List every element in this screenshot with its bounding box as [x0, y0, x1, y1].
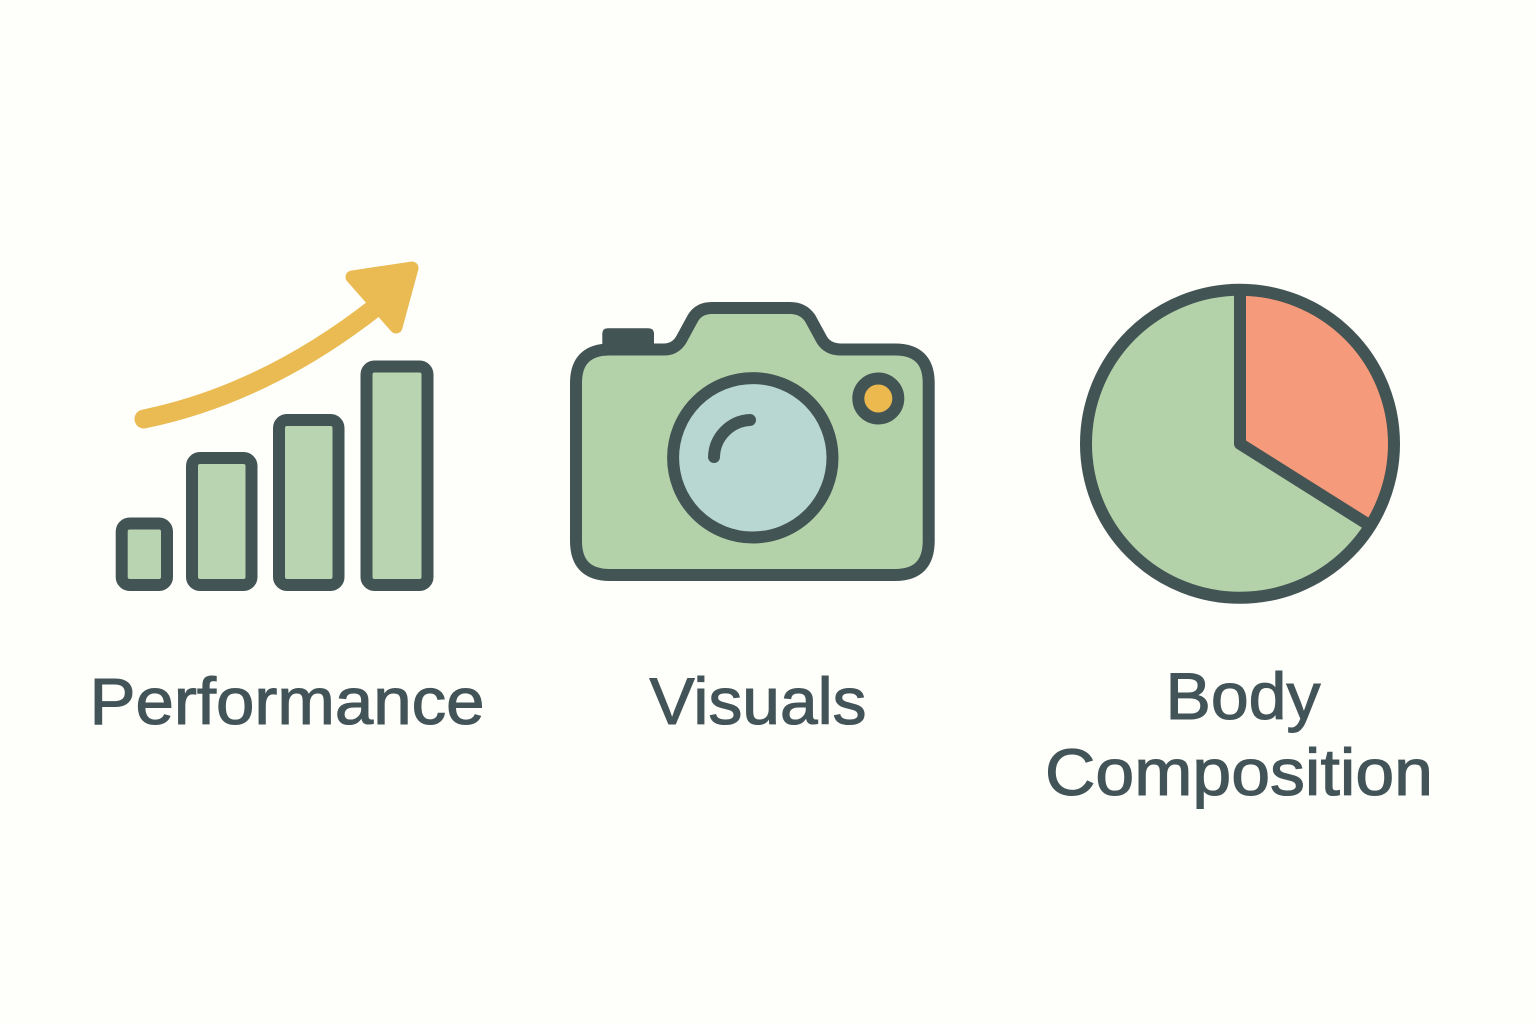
- bar 3: [279, 420, 338, 585]
- camera shutter button: [602, 328, 654, 352]
- camera flash light: [858, 378, 898, 418]
- label: Body Composition: [1045, 659, 1433, 809]
- bar 2: [192, 458, 252, 585]
- pie highlighted slice: [1240, 290, 1394, 528]
- icon: camera: [576, 308, 929, 575]
- arrow: rising trend: [144, 268, 412, 419]
- label: Body Composition: Composition: [1045, 735, 1433, 809]
- bar 1: [122, 524, 167, 585]
- icon: pie chart: [1086, 290, 1394, 598]
- pie base slice: [1086, 290, 1394, 598]
- pie outline: [1086, 290, 1394, 598]
- label: Visuals: Visuals: [650, 664, 866, 738]
- label: Performance: Performance: [90, 664, 484, 738]
- bar 4: [366, 366, 428, 585]
- label: Body Composition: Body: [1166, 659, 1320, 733]
- camera body: [576, 308, 929, 575]
- camera lens: [673, 378, 832, 538]
- icon: performance bar chart with arrow: [122, 268, 427, 585]
- pie slice dividers: [1240, 290, 1369, 525]
- lens glare: [714, 420, 750, 457]
